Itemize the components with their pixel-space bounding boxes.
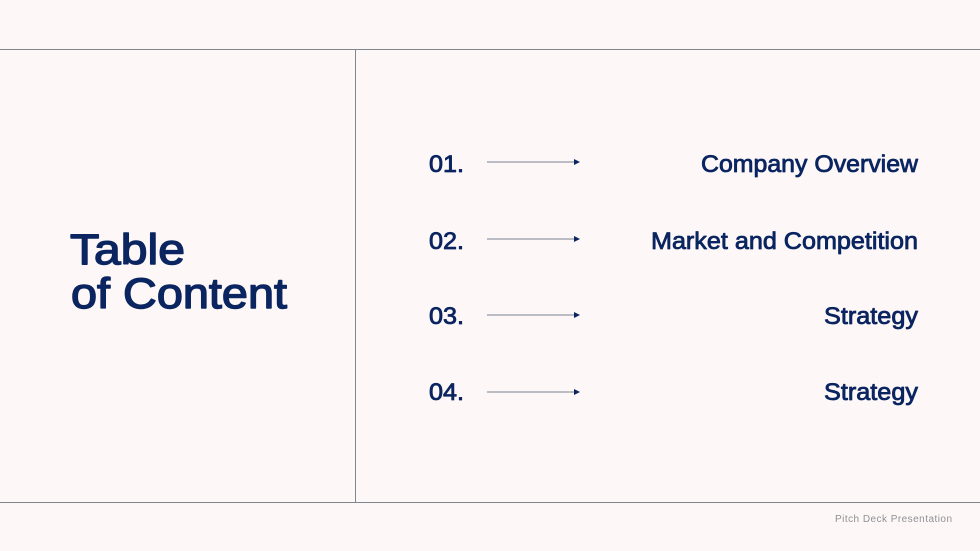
arrow 03 [487, 312, 580, 318]
footer caption: Pitch Deck Presentation [835, 514, 952, 525]
arrow 01 [487, 159, 580, 165]
number 02: 02. [429, 228, 464, 255]
item 01 [429, 151, 919, 178]
title: Table [70, 226, 185, 274]
label 01: Company Overview [701, 151, 919, 178]
arrow 02 [487, 236, 580, 242]
label 02: Market and Competition [651, 228, 918, 255]
item 03 [429, 303, 918, 330]
number 04: 04. [429, 379, 464, 406]
number 01: 01. [429, 151, 464, 178]
arrow 04 [487, 389, 580, 395]
label 04: Strategy [824, 379, 918, 406]
title [70, 226, 287, 318]
number 03: 03. [429, 303, 464, 330]
item 04 [429, 379, 918, 406]
item 02 [429, 228, 918, 255]
title: of Content [71, 270, 287, 318]
label 03: Strategy [824, 303, 918, 330]
